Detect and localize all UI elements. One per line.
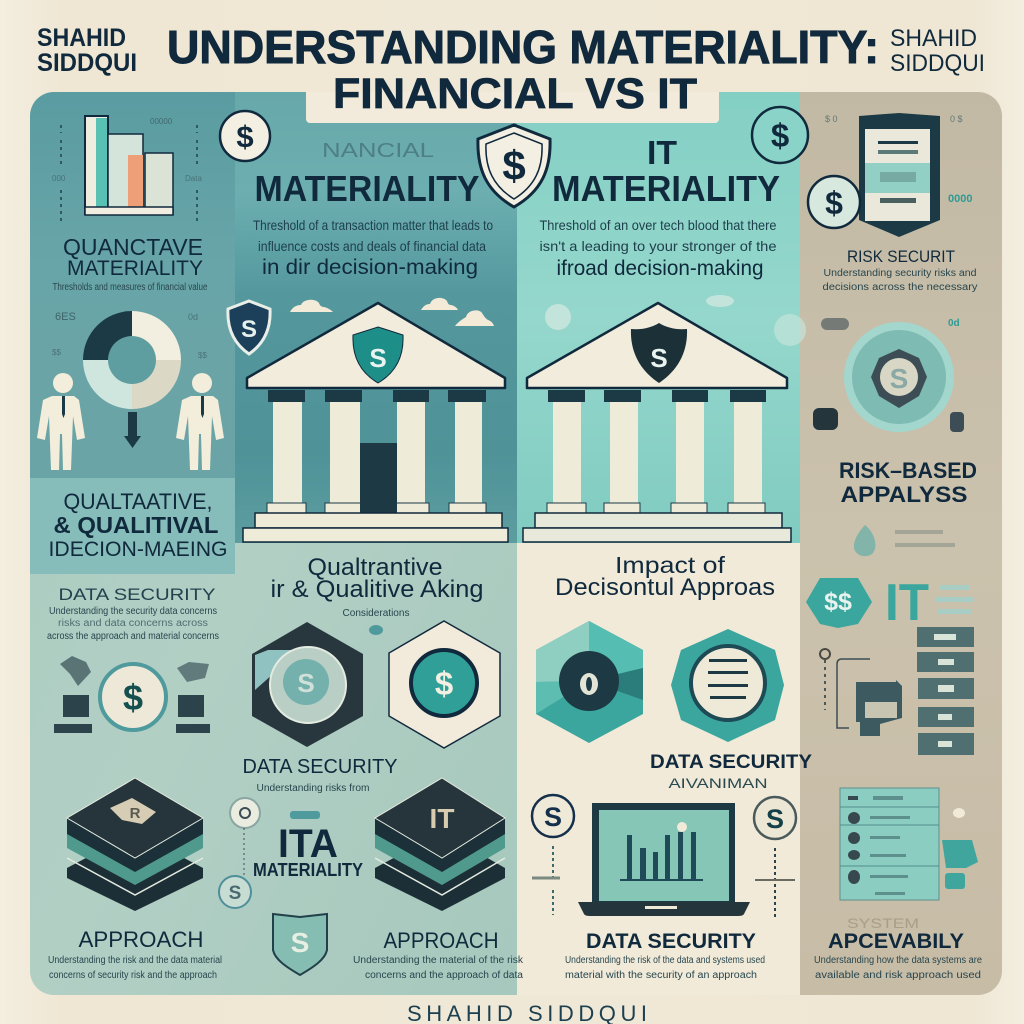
- text: impact heading: [555, 552, 775, 601]
- text: risk security: [822, 247, 978, 293]
- icon: checklist panel: [840, 788, 978, 900]
- text: financial description: influence costs and deals of financial data: [258, 238, 486, 254]
- text: approach right: Understanding the material of the risk: [353, 955, 524, 966]
- icon: laptop coins: S: [766, 804, 784, 834]
- icon: pie chart with two people: 6ES: [55, 311, 76, 323]
- text: data security left: across the approach and material concerns: [47, 631, 219, 642]
- icon: laptop coins: S: [544, 802, 562, 832]
- text: it description: Threshold of an over tech blood that there: [540, 217, 777, 233]
- icon: risk coin circle: S: [890, 363, 908, 394]
- text: financial description: Threshold of a transaction matter that leads to: [253, 217, 493, 233]
- text: it description: ifroad decision-making: [556, 257, 764, 280]
- text: data security center left: Understanding risks from: [256, 783, 370, 794]
- text: risk-based analysis: APPALYSS: [840, 482, 968, 507]
- icon: dollar and it list: IT: [885, 574, 929, 632]
- text: apcevabily: [814, 915, 982, 981]
- text: data security center right: AIVANIMAN: [668, 775, 768, 791]
- text: data security left: [47, 585, 219, 642]
- icon: dollar and it list: [806, 574, 974, 755]
- icon: dollar coin top left: [220, 111, 270, 161]
- title: UNDERSTANDING MATERIALITY:: [167, 21, 879, 73]
- title: [167, 21, 879, 118]
- heading: financial materiality: MATERIALITY: [254, 168, 480, 209]
- title: FINANCIAL VS IT: [333, 70, 697, 118]
- text: apcevabily: APCEVABILY: [828, 930, 964, 953]
- text: approach left: Understanding the risk and the data material: [48, 955, 222, 966]
- author tag left: SIDDQUI: [37, 49, 137, 77]
- icon: document top right: 0 $: [950, 114, 963, 124]
- icon: data coin: [54, 656, 210, 733]
- text: it description: [540, 217, 777, 280]
- icon: dollar and it list: $$: [824, 588, 852, 616]
- icon: dollar coin top left: $: [236, 119, 254, 154]
- icon: left stacked layers: [67, 778, 203, 911]
- text: qualitative heading: Qualtrantive: [308, 554, 442, 581]
- icon: document top right: $ 0: [825, 114, 838, 124]
- heading: it materiality: IT: [647, 134, 677, 171]
- text: risk-based analysis: [839, 458, 977, 507]
- text: qualitative and decision making: QUALTAATIVE,: [64, 489, 212, 514]
- icon: bar chart: 00000: [150, 117, 173, 126]
- author tag right: SHAHID: [890, 25, 977, 52]
- icon: laptop chart: [578, 803, 750, 916]
- text: data security center left: [242, 756, 398, 794]
- icon: central shield: $: [502, 142, 526, 189]
- text: ita materiality: MATERIALITY: [253, 860, 363, 880]
- text: apcevabily: Understanding how the data systems are: [814, 955, 982, 966]
- heading: financial materiality: [254, 140, 480, 209]
- heading: financial materiality: NANCIAL: [322, 140, 434, 162]
- text: qualitative heading: [270, 554, 484, 619]
- text: data security center right: DATA SECURITY: [650, 752, 812, 773]
- icon: pie chart with two people: $$: [198, 351, 207, 360]
- author tag left: [37, 24, 137, 77]
- text: it description: isn't a leading to your stronger of the: [540, 238, 777, 254]
- icon: faint clouds right: [545, 295, 806, 346]
- icon: small coins: S: [229, 883, 241, 904]
- icon: teal hexagon: [536, 621, 643, 743]
- heading: it materiality: MATERIALITY: [552, 168, 780, 209]
- icon: bar chart: Data: [185, 174, 202, 183]
- icon: left stacked layers: R: [130, 805, 141, 822]
- text: qualitative heading: Considerations: [342, 608, 410, 619]
- icon: dollar coin right: [808, 176, 860, 228]
- text: financial description: [253, 217, 493, 279]
- text: data security left: Understanding the security data concerns: [49, 606, 217, 617]
- text: approach right: concerns and the approach of data: [365, 970, 523, 981]
- text: qualitative and decision making: [48, 489, 228, 561]
- text: risk security: Understanding security risks and: [824, 268, 976, 279]
- text: approach right: [353, 928, 524, 981]
- author tag right: SIDDQUI: [890, 50, 985, 77]
- icon: document top right: 0000: [948, 193, 972, 205]
- icon: financial temple: S: [369, 343, 387, 373]
- text: risk security: RISK SECURIT: [847, 247, 955, 266]
- text: data security left: DATA SECURITY: [58, 585, 216, 604]
- icon: faint analysis graphic: [854, 525, 955, 556]
- text: data security center right: [650, 752, 812, 791]
- text: approach left: concerns of security risk and the approach: [49, 970, 217, 981]
- text: approach left: APPROACH: [78, 927, 204, 952]
- text: quantitative caption: Thresholds and measures of financial value: [52, 282, 208, 293]
- text: approach right: APPROACH: [384, 928, 498, 953]
- icon: dollar coin top right: $: [771, 117, 789, 154]
- text: qualitative and decision making: & QUALITIVAL: [54, 512, 218, 538]
- author tag right: [890, 25, 985, 77]
- heading: it materiality: [552, 134, 780, 209]
- icon: shield bottom: [273, 914, 327, 975]
- text: apcevabily: available and risk approach used: [815, 970, 981, 981]
- text: impact heading: Decisontul Approas: [555, 574, 775, 601]
- icon: light hexagon: $: [435, 665, 453, 702]
- heading: materiality: MATERIALITY: [67, 257, 203, 280]
- icon: it temple: S: [650, 343, 668, 373]
- text: ita materiality: [253, 811, 363, 880]
- text: data security bottom: Understanding the risk of the data and systems used: [565, 955, 765, 966]
- icon: small shield left: S: [241, 316, 257, 343]
- heading: quantitative: QUANCTAVE: [63, 234, 203, 260]
- icon: dollar coin top right: [752, 107, 808, 163]
- text: data security bottom: DATA SECURITY: [586, 930, 756, 953]
- icon: it temple: [523, 303, 791, 542]
- icon: central shield: [478, 125, 550, 207]
- icon: pie chart with two people: $$: [52, 348, 61, 357]
- text: data security center left: DATA SECURITY: [242, 756, 398, 778]
- icon: financial temple: [243, 303, 508, 542]
- icon: right stacked layers: [375, 778, 505, 911]
- text: data security bottom: material with the security of an approach: [565, 970, 757, 981]
- icon: dark hexagon: [252, 622, 363, 747]
- icon: bar chart: 000: [52, 174, 66, 183]
- icon: pie chart with two people: [37, 311, 224, 470]
- icon: document top right: [825, 113, 972, 237]
- icon: right stacked layers: IT: [430, 803, 454, 834]
- text: impact heading: Impact of: [615, 552, 726, 578]
- text: risk-based analysis: RISK–BASED: [839, 458, 977, 483]
- icon: data coin: $: [123, 677, 143, 718]
- icon: bar chart: [52, 116, 202, 225]
- icon: light hexagon: [369, 621, 500, 748]
- text: qualitative heading: ir & Qualitive Aking: [270, 576, 484, 603]
- text: data security left: risks and data concerns across: [58, 618, 208, 629]
- text: risk security: decisions across the necessary: [822, 282, 978, 293]
- text: apcevabily: SYSTEM: [847, 915, 919, 931]
- icon: clouds left: [290, 298, 494, 326]
- text: financial description: in dir decision-making: [262, 256, 478, 279]
- icon: pie chart with two people: 0d: [188, 312, 198, 322]
- icon: risk coin circle: 0d: [948, 318, 960, 329]
- icon: laptop coins: [532, 795, 796, 918]
- icon: teal octagon list: [671, 629, 784, 742]
- text: qualitative and decision making: IDECION-MAEING: [48, 538, 228, 561]
- icon: shield bottom: S: [291, 927, 309, 958]
- icon: dark hexagon: S: [297, 668, 315, 698]
- text: data security bottom: [565, 930, 765, 981]
- icon: small coins: [219, 798, 260, 908]
- icon: small shield left: [228, 301, 270, 354]
- text: approach left: [48, 927, 222, 981]
- icon: dollar coin right: $: [825, 185, 843, 221]
- text: ita materiality: ITA: [278, 822, 338, 866]
- icon: risk coin circle: [813, 318, 964, 432]
- panel: quantitative materiality: [52, 116, 208, 293]
- author tag left: SHAHID: [37, 24, 126, 52]
